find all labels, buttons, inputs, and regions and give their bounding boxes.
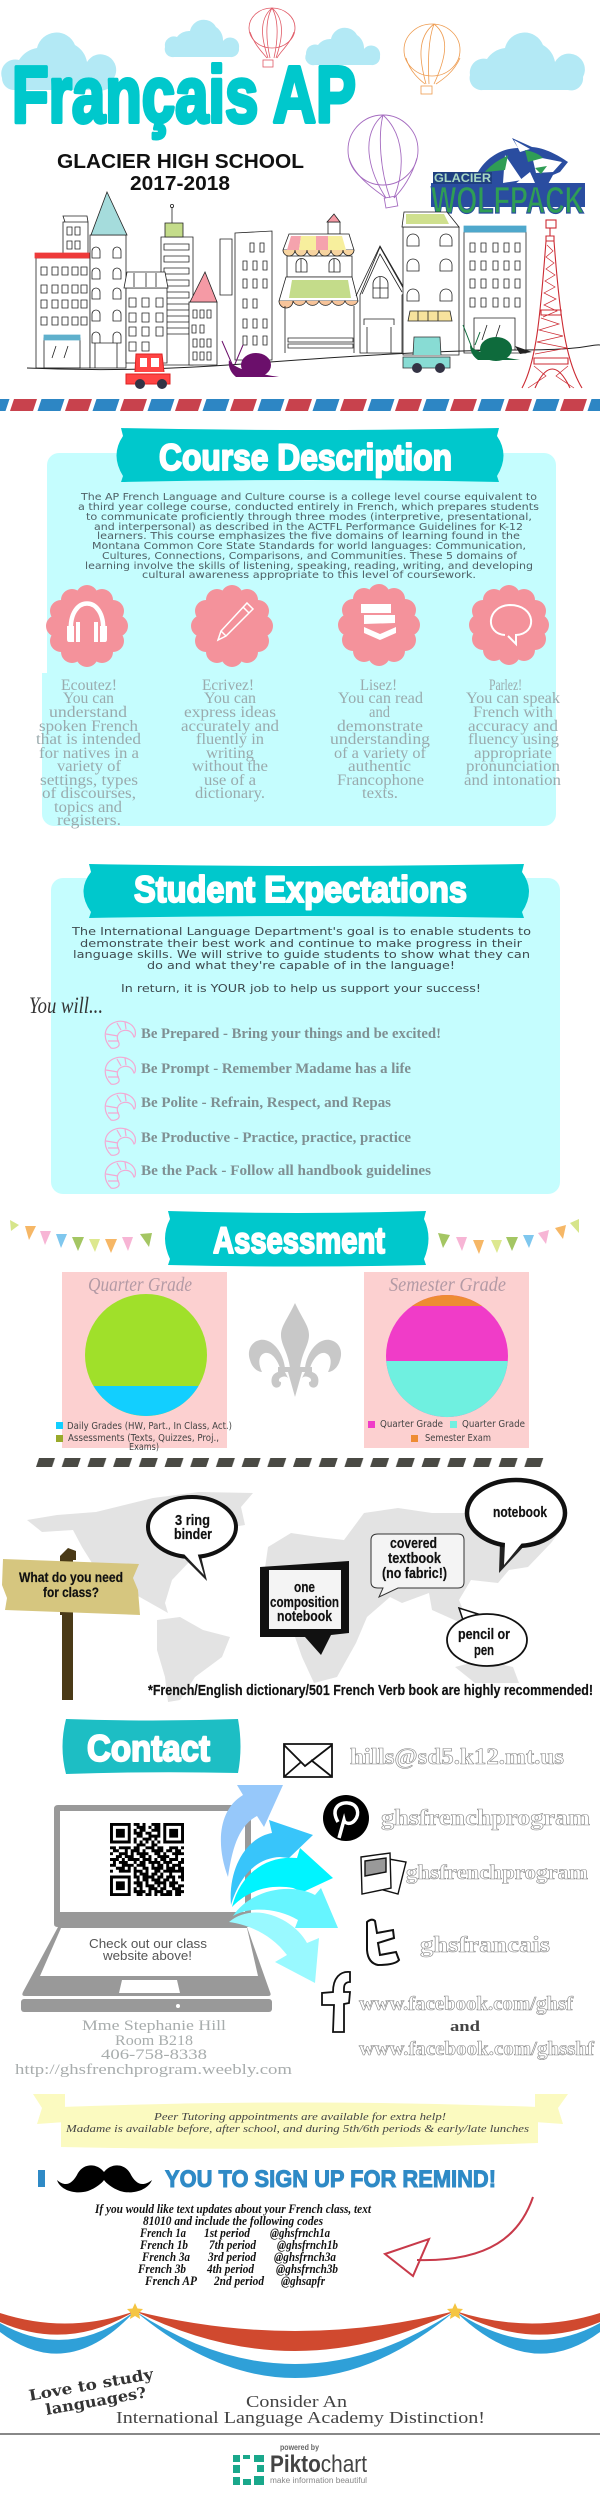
text: ecoutez [36,677,141,829]
arrow: sky blue [231,1820,313,1905]
text: ecoutez: Ecoutez! [61,677,117,694]
text: ecrivez: dictionary. [195,785,265,802]
text: lisez: demonstrate [337,718,423,735]
text: remind instructions: 7th period [209,2238,257,2252]
text: remind instructions [94,2202,371,2288]
text: teacher details [15,2018,292,2078]
icon: books badge [338,584,420,666]
bubble: covered textbook: covered [390,1535,437,1552]
bubble: notebook [467,1480,565,1573]
bubble: composition notebook [260,1561,349,1655]
text: remind instructions: 4th period [206,2262,255,2276]
school name [57,151,304,195]
icon: croissant [105,1021,135,1048]
bubble: notebook: notebook [493,1504,548,1521]
text: department goal: The International Language Department's goal is to enable students to [71,925,531,938]
bunting: left [10,1220,152,1253]
balloon: orange [404,24,460,94]
building: pink roof house [189,272,217,365]
text: course summary: and interpersonal) as described in the ACTFL Performance Guidelines for K-12 [94,522,523,533]
blue car [403,337,450,373]
arrow: light blue [221,1785,283,1877]
contact: email [284,1744,564,1777]
text: ecrivez: without the [192,758,268,775]
ribbon: tutoring: Peer Tutoring appointments are available for extra help! [153,2111,446,2123]
heading: student expectations [84,864,529,918]
icon: mustache [57,2165,152,2192]
text: parlez: and intonation [464,772,561,789]
text: teacher details: Room B218 [115,2033,193,2049]
text: department goal: demonstrate their best work and continue to make progress in their [80,937,523,950]
text: course summary: Cultures, Connections, Comparisons, and Communities. These 5 domains of [102,551,518,562]
header: clouds [1,20,585,90]
text: remind instructions: French 3a [141,2250,190,2264]
balloon: purple [348,115,418,208]
legend: semester [368,1419,525,1444]
legend: quarter: Assessments (Texts, Quizzes, Proj., [68,1433,219,1444]
eiffel tower [522,220,582,388]
text: be polite: Be Polite - Refrain, Respect, and Repas [141,1095,391,1111]
icon: fleur-de-lis [249,1303,341,1397]
text: parlez: You can speak [466,690,560,707]
contact: photos [361,1853,589,1894]
arrow: red hand drawn [385,2197,533,2276]
bubble: 3 ring binder: 3 ring [175,1512,210,1529]
title: Français AP [12,50,356,139]
list: expectations [105,1021,441,1188]
icon: pencil badge [191,585,273,667]
building: tall right block [220,231,272,360]
text: ecoutez: understand [49,704,127,721]
icon: croissant [105,1093,135,1120]
bubble: covered textbook: textbook [388,1550,442,1567]
text: remind instructions: French AP [144,2274,197,2288]
remind heading: YOU TO SIGN UP FOR REMIND! [165,2166,496,2193]
text: ecrivez: fluently in [196,731,264,748]
text: remind instructions: French 1b [139,2238,188,2252]
text: ecoutez: You can [63,690,114,707]
ribbon: tutoring: Madame is available before, after school, and during 5th/6th periods & early/late lunches [65,2123,529,2135]
text: lisez: Francophone [337,772,424,789]
text: ecoutez: for natives in a [39,745,139,762]
panel: quarter grade [56,1272,232,1453]
text: ecoutez: spoken French [39,718,138,735]
building: low block [124,272,168,363]
text: remind instructions: 1st period [204,2226,251,2240]
chart: quarter pie [85,1294,207,1416]
icon: croissant [105,1161,135,1188]
building: awning shop [279,214,358,353]
chart: semester pie [386,1295,508,1417]
text: parlez [464,677,561,789]
piktochart footer: Piktochart [270,2451,367,2478]
heading: assessment [165,1211,428,1266]
contact: photos: ghsfrenchprogram [406,1860,589,1884]
bubble: composition notebook: composition [270,1594,339,1611]
text: lisez: and [369,704,390,721]
text: you will: You will... [29,993,103,1018]
heading: course description: Course Description [159,437,452,478]
text: be productive: Be Productive - Practice, practice, practice [141,1130,411,1146]
city skyline [27,192,600,370]
text: course summary: learning involve the skills of listening, speaking, reading, writing, and developing [85,561,533,572]
text: be the pack: Be the Pack - Follow all handbook guidelines [141,1163,431,1179]
text: ecrivez: Ecrivez! [202,677,254,694]
text: love to study languages: languages? [44,2383,148,2419]
legend: semester: Semester Exam [425,1433,491,1444]
heading: contact: Contact [87,1728,210,1769]
icon: croissant [105,1128,135,1155]
text: course summary: Montana Common Core State Standards for world languages: Communication, [92,541,526,552]
text: academy distinction: Consider An [246,2392,348,2411]
legend: quarter: Exams) [129,1442,159,1453]
text: course summary: a third year college course, conducted entirely in French, which prepares students [78,502,539,513]
text: remind instructions: @ghsfrnch1b [277,2238,338,2252]
world map [27,1492,566,1702]
bubble: 3 ring binder: binder [174,1526,212,1543]
purple snail [222,341,279,377]
building: arched windows [402,212,459,355]
panel: course description [36,428,561,829]
bubble: pencil or pen: pencil or [458,1626,510,1643]
legend: quarter [56,1421,232,1453]
text: course summary: to communicate proficiently through three modes (interpretive, presentational, [86,512,532,523]
text: ecoutez: variety of [57,758,122,775]
contact: twitter [367,1920,550,1965]
text: lisez [330,677,430,802]
icon: headphones badge [46,585,128,667]
qr code [110,1824,184,1895]
swags: tricolour bunting [0,2303,600,2378]
piktochart footer: powered by [280,2443,319,2452]
text: teacher details: Mme Stephanie Hill [82,2018,226,2034]
legend: quarter: Daily Grades (HW, Part., In Class, Act.) [67,1421,232,1432]
contact: pinterest: ghsfrenchprogram [381,1805,590,1830]
remind heading [38,2165,496,2193]
text: course summary [78,492,539,581]
wolfpack logo [431,138,585,222]
text: ecrivez: You can [204,690,256,707]
text: department goal: In return, it is YOUR job to help us support your success! [121,982,481,995]
text: teacher details: 406-758-8338 [101,2047,207,2063]
text: remind instructions: 81010 and include the following codes [143,2214,323,2228]
signpost [2,1548,140,1700]
red car [126,354,170,389]
text: lisez: You can read [338,690,423,707]
text: remind instructions: If you would like text updates about your French class, text [94,2202,371,2216]
text: lisez: of a variety of [334,745,427,762]
bubble: covered textbook [371,1534,464,1597]
school name: GLACIER HIGH SCHOOL [57,151,304,173]
text: ecoutez: topics and [54,799,122,816]
text: love to study languages: Love to study [27,2365,156,2405]
text: remind instructions: 2nd period [213,2274,265,2288]
text: remind instructions: French 1a [139,2226,186,2240]
text: remind instructions: @ghsfrnch1a [270,2226,330,2240]
text: remind instructions: @ghsfrnch3b [276,2262,338,2276]
legend: semester: Quarter Grade [380,1419,443,1430]
text: remind instructions: @ghsfrnch3a [274,2250,336,2264]
bubble: pencil or pen [447,1608,527,1666]
ribbon: tutoring [33,2094,568,2149]
contact: email: hills@sd5.k12.mt.us [350,1744,564,1770]
text: be prepared: Be Prepared - Bring your things and be excited! [141,1026,441,1042]
text: quarter title: Quarter Grade [88,1274,192,1296]
contact: twitter: ghsfrancais [420,1932,550,1957]
piktochart footer [233,2443,367,2485]
text: ecoutez: that is intended [36,731,141,748]
contact: pinterest [323,1795,590,1841]
text: ecoutez: of discourses, [42,785,136,802]
airmail stripe [0,399,600,411]
text: semester title: Semester Grade [389,1274,506,1296]
text: love to study languages [27,2365,159,2421]
wolfpack logo: GLACIER [434,171,491,185]
contact: facebook: www.facebook.com/ghsshf [359,2038,594,2060]
panel: student expectations [29,864,560,1194]
panel: semester grade [364,1272,529,1448]
contact: facebook: www.facebook.com/ghsf [359,1993,573,2015]
text: lisez: authentic [348,758,411,775]
heading: assessment: Assessment [213,1220,385,1261]
text: course summary: learners. This course emphasizes the five domains of learning found in the [97,531,520,542]
ground line [27,345,600,370]
legend: semester: Quarter Grade [462,1419,525,1430]
arrow: cyan [232,1848,333,1907]
building: round tower [90,192,127,368]
contact: facebook: and [450,2019,481,2035]
text: ecoutez: settings, types [40,772,138,789]
text: remind instructions: @ghsapfr [281,2274,325,2288]
text: remind instructions: 3rd period [207,2250,257,2264]
arrow: pale aqua [229,1912,319,1983]
text: ecrivez: express ideas [184,704,276,721]
text: parlez: French with [473,704,553,721]
text: department goal: language skills. We will strive to guide students to show what they can [73,948,530,961]
text: course summary: The AP French Language and Culture course is a college level course equivalent to [80,492,537,503]
text: teacher details: http://ghsfrenchprogram.weebly.com [15,2062,292,2078]
text: ecrivez [181,677,279,802]
icon: speech bubble badge [469,585,549,665]
text: academy distinction [116,2392,485,2427]
text: lisez: understanding [330,731,430,748]
signpost: What do you need [19,1569,123,1585]
text: class website: Check out our class [89,1936,208,1951]
text: be prompt: Be Prompt - Remember Madame has a life [141,1061,411,1077]
bunting: right [438,1219,579,1254]
building: office left [35,216,90,368]
building: striped tower [161,204,193,365]
text: parlez: pronunciation [466,758,560,775]
text: ecrivez: accurately and [181,718,279,735]
bubble: composition notebook: notebook [277,1608,333,1625]
school name: 2017-2018 [130,173,230,195]
bubble: covered textbook: (no fabric!) [382,1565,447,1582]
text: lisez: texts. [362,785,398,802]
contact: facebook [322,1972,594,2060]
text: class website [89,1936,208,1963]
text: lisez: Lisez! [360,677,397,694]
text: parlez: Parlez! [489,677,522,694]
bubble: composition notebook: one [294,1579,315,1596]
text: department goal: do and what they're capable of in the language! [147,959,455,972]
icon: croissant [105,1057,135,1084]
heading: contact [62,1719,240,1774]
text: class website: website above! [102,1948,192,1963]
text: academy distinction: International Language Academy Distinction! [116,2408,485,2427]
text: parlez: accuracy and [468,718,558,735]
text: course summary: cultural awareness appropriate to this level of coursework. [142,570,476,581]
signpost: for class? [43,1584,99,1600]
text: parlez: appropriate [474,745,552,762]
bubble: 3 ring binder [148,1497,236,1581]
heading: student expectations: Student Expectations [134,869,467,910]
text: remind instructions: French 3b [137,2262,186,2276]
text: ecrivez: writing [206,745,254,762]
bubble: pencil or pen: pen [474,1642,494,1659]
text: parlez: fluency using [468,731,559,748]
laptop [21,1805,272,2012]
building: blue top block [464,226,526,353]
text: department goal [71,925,531,995]
balloon: red [249,8,295,67]
heading: course description [116,428,504,482]
piktochart footer: make information beautiful [270,2476,367,2485]
text: ecoutez: registers. [57,812,121,829]
text: ecrivez: use of a [204,772,256,789]
arrow: aqua [233,1888,338,1928]
green snail [463,325,532,361]
building: gabled house [356,246,407,353]
